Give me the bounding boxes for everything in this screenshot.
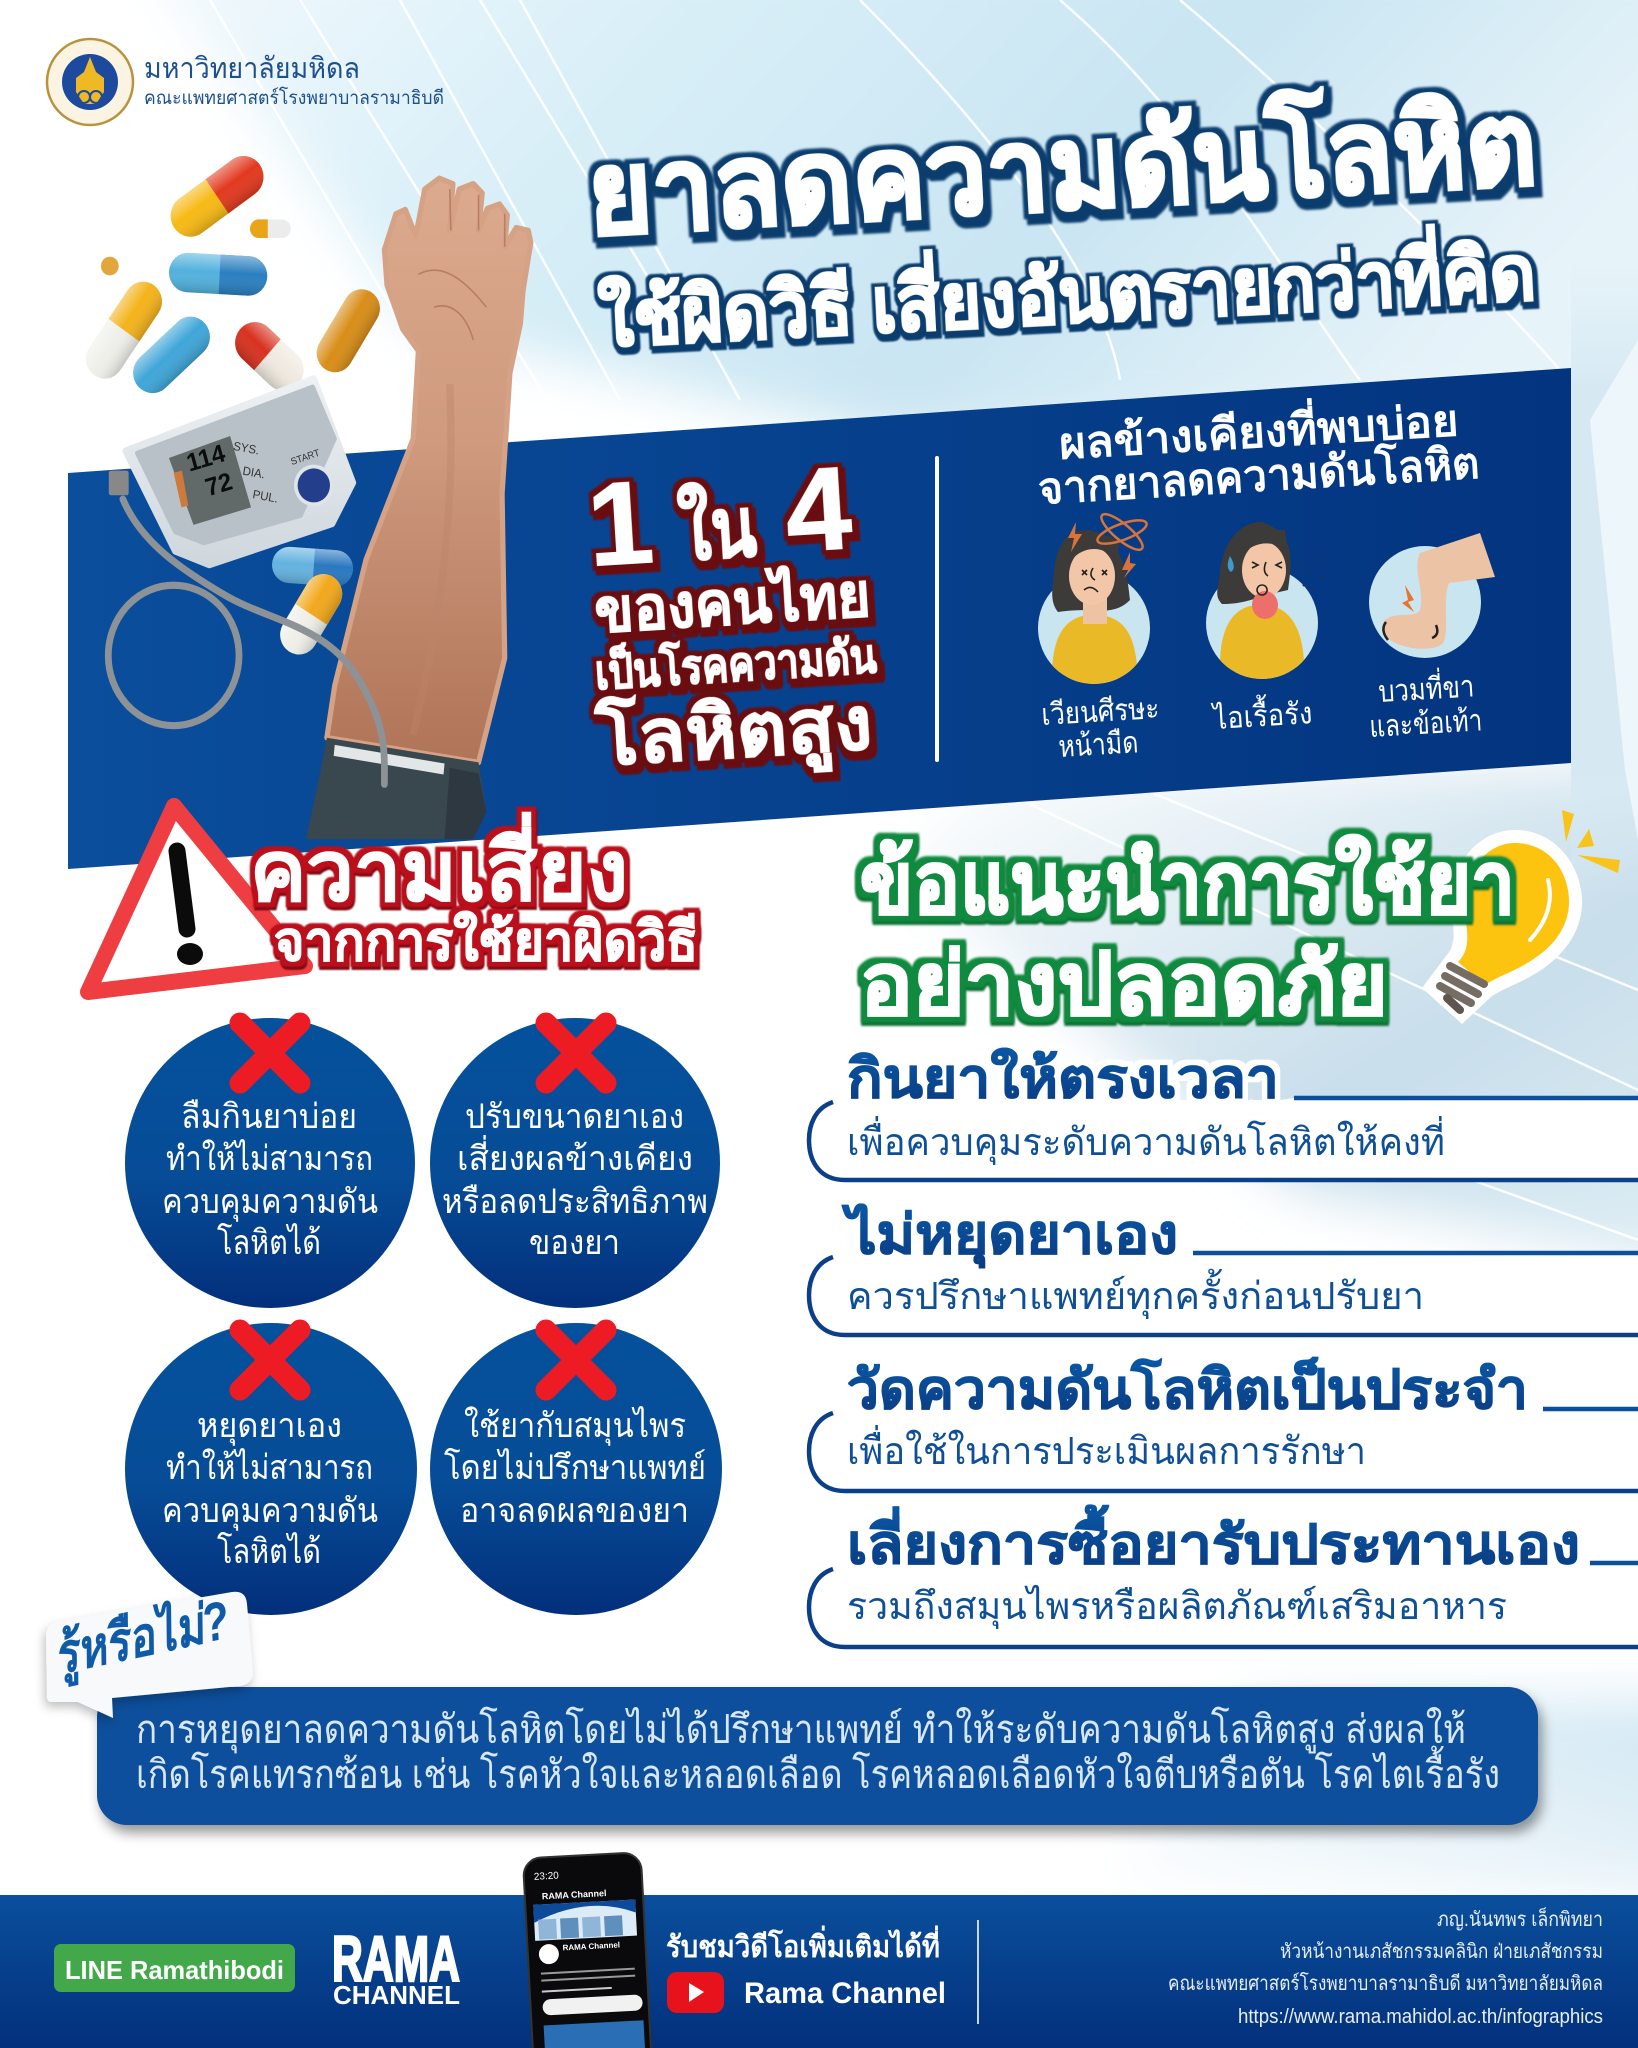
risk: mixing with herbs: โดยไม่ปรึกษาแพทย์: [444, 1448, 706, 1487]
arm: [327, 178, 531, 762]
video call to action: Rama Channel: [744, 1977, 946, 2010]
pill: orange dot: [101, 257, 119, 275]
organisation name: คณะแพทยศาสตร์โรงพยาบาลรามาธิบดี: [144, 86, 444, 109]
risk: adjusting dose: ของยา: [529, 1224, 620, 1262]
safe use heading: อย่างปลอดภัย: [860, 937, 1388, 1033]
side effect labels: ไอเรื้อรัง: [1210, 691, 1313, 736]
advice: measure regularly: วัดความดันโลหิตเป็นประจำ: [847, 1358, 1528, 1420]
side effect labels: บวมที่ขา: [1377, 665, 1475, 709]
pill: red and white: [227, 314, 312, 400]
safe use heading: [860, 835, 1515, 1033]
LINE badge: [54, 1944, 295, 1992]
risk: forgetting doses: [125, 1018, 415, 1308]
risk: forgetting doses: ลืมกินยาบ่อย: [181, 1098, 357, 1136]
blood pressure monitor: DIA.: [242, 464, 266, 482]
risk: adjusting dose: หรือลดประสิทธิภาพ: [442, 1183, 708, 1221]
stat: 1 in 4 Thais: 1: [584, 456, 657, 592]
advice: measure regularly: เพื่อใช้ในการประเมินผลการรักษา: [847, 1425, 1366, 1473]
stat: 1 in 4 Thais: เป็นโรคความดัน: [593, 626, 878, 699]
credits: [1168, 1906, 1603, 2028]
stat: 1 in 4 Thais: 4: [782, 442, 855, 578]
did you know bubble: รู้หรือไม่?: [48, 1588, 235, 1689]
blood pressure monitor: 114: [184, 440, 229, 478]
side effect labels: [1040, 665, 1483, 764]
pill: blue diagonal: [125, 308, 218, 402]
did you know panel: การหยุดยาลดความดันโลหิตโดยไม่ได้ปรึกษาแพทย์ ทำให้ระดับความดันโลหิตสูง ส่งผลให้: [136, 1706, 1466, 1754]
risk: stopping medicine: [125, 1323, 417, 1615]
RAMA Channel logo: CHANNEL: [333, 1980, 460, 2010]
credits: ภญ.นันทพร เล็กพิทยา: [1437, 1906, 1603, 1931]
blood pressure monitor: [109, 378, 353, 565]
pill: yellow and white: [79, 274, 169, 386]
blood pressure monitor: START: [289, 448, 321, 468]
blood pressure monitor: SYS.: [232, 440, 260, 458]
advice: take on time: [809, 1047, 1638, 1180]
icon: dizziness: [1038, 509, 1150, 690]
safe use heading: ข้อแนะนำการใช้ยา: [860, 835, 1515, 932]
risk: stopping medicine: ทำให้ไม่สามารถ: [166, 1448, 373, 1487]
organisation name: มหาวิทยาลัยมหิดล: [144, 53, 360, 85]
side effect labels: และข้อเท้า: [1368, 704, 1483, 744]
stat: 1 in 4 Thais: ใน: [675, 478, 759, 578]
icon: light bulb: [1422, 810, 1620, 1024]
main title: ยาลดความดันโลหิต: [584, 76, 1540, 259]
risk heading: ความเสี่ยง: [250, 812, 628, 918]
credits: https://www.rama.mahidol.ac.th/infographics: [1238, 2006, 1603, 2028]
phone banner: [533, 1900, 637, 1941]
did you know bubble: [46, 1588, 253, 1718]
pill: amber: [310, 282, 387, 380]
warning triangle: [88, 806, 305, 992]
phone mockup: RAMA Channel: [542, 1888, 607, 1901]
main title: ใช้ผิดวิธี เสี่ยงอันตรายกว่าที่คิด: [596, 219, 1538, 363]
RAMA Channel logo: [332, 1923, 460, 2010]
icon: swollen leg: [1369, 533, 1495, 658]
advice: do not stop: ควรปรึกษาแพทย์ทุกครั้งก่อนปรับยา: [847, 1268, 1424, 1319]
advice: do not stop: [809, 1203, 1638, 1335]
phone channel avatar: [538, 1944, 559, 1965]
phone mockup: RAMA Channel: [562, 1940, 620, 1952]
video call to action: [666, 1925, 946, 2013]
side effect labels: หน้ามืด: [1057, 726, 1139, 764]
band divider: [935, 456, 939, 762]
footer bar: [0, 1895, 1638, 2048]
blood pressure monitor: 72: [203, 468, 235, 502]
icon: chronic cough: [1206, 522, 1324, 680]
RAMA Channel logo: RAMA: [332, 1923, 460, 1995]
risk: adjusting dose: [430, 1018, 720, 1308]
risk: stopping medicine: ควบคุมความดัน: [162, 1492, 378, 1531]
organisation name: [144, 53, 444, 109]
stat: 1 in 4 Thais: ของคนไทย: [593, 559, 872, 645]
video call to action: รับชมวิดีโอเพิ่มเติมได้ที่: [666, 1925, 940, 1964]
LINE badge: LINE Ramathibodi: [65, 1955, 284, 1985]
pill: red and yellow: [163, 148, 271, 245]
footer divider: [977, 1920, 979, 2024]
side effects heading: ผลข้างเคียงที่พบบ่อย: [1057, 389, 1460, 469]
advice: measure regularly: [809, 1358, 1638, 1491]
risk: mixing with herbs: ใช้ยากับสมุนไพร: [464, 1406, 686, 1446]
risk heading: จากการใช้ยาผิดวิธี: [274, 910, 698, 972]
advice: take on time: กินยาให้ตรงเวลา: [847, 1047, 1279, 1109]
risk: forgetting doses: โลหิตได้: [217, 1223, 321, 1262]
risk heading: [250, 812, 698, 972]
side effect labels: เวียนศีรษะ: [1040, 692, 1160, 732]
pill: small yellow and white: [250, 219, 291, 238]
risk: adjusting dose: ปรับขนาดยาเอง: [465, 1098, 684, 1136]
main title: [584, 76, 1540, 363]
risk: adjusting dose: เสี่ยงผลข้างเคียง: [457, 1135, 693, 1178]
icon: YouTube: [667, 1972, 724, 2013]
logo: Mahidol seal: [47, 39, 133, 125]
advice: take on time: เพื่อควบคุมระดับความดันโลหิตให้คงที่: [847, 1116, 1445, 1165]
blood pressure cuff: [306, 738, 486, 839]
side effects heading: จากยาลดความดันโลหิต: [1037, 436, 1481, 514]
pill: blue lower: [271, 546, 354, 588]
advice: do not stop: ไม่หยุดยาเอง: [842, 1203, 1178, 1269]
risk: mixing with herbs: อาจลดผลของยา: [460, 1492, 689, 1530]
blood pressure monitor: PUL.: [252, 488, 279, 506]
side effects heading: [1037, 389, 1481, 514]
advice: avoid self-medicating: เลี่ยงการซื้อยารับประทานเอง: [847, 1505, 1580, 1575]
stat: 1 in 4 Thais: โลหิตสูง: [593, 679, 875, 786]
advice: avoid self-medicating: รวมถึงสมุนไพรหรือผลิตภัณฑ์เสริมอาหาร: [847, 1585, 1507, 1629]
advice: avoid self-medicating: [809, 1505, 1638, 1647]
risk: forgetting doses: ทำให้ไม่สามารถ: [166, 1139, 373, 1178]
blue band: [68, 368, 1571, 869]
phone mockup: [523, 1852, 653, 2048]
risk: stopping medicine: หยุดยาเอง: [197, 1407, 342, 1446]
stat: 1 in 4 Thais: [584, 442, 878, 786]
pill: yellow lower: [273, 567, 349, 662]
pill: blue horizontal: [168, 252, 268, 297]
did you know panel: [97, 1687, 1538, 1825]
risk: mixing with herbs: [430, 1323, 722, 1615]
phone subscribe button: [542, 1994, 643, 2016]
phone mockup: 23:20: [534, 1871, 560, 1883]
illustration: pills, blood pressure monitor and arm: [79, 148, 531, 839]
risk: forgetting doses: ควบคุมความดัน: [162, 1183, 378, 1222]
risk: stopping medicine: โลหิตได้: [217, 1532, 321, 1571]
tube: [108, 499, 384, 784]
